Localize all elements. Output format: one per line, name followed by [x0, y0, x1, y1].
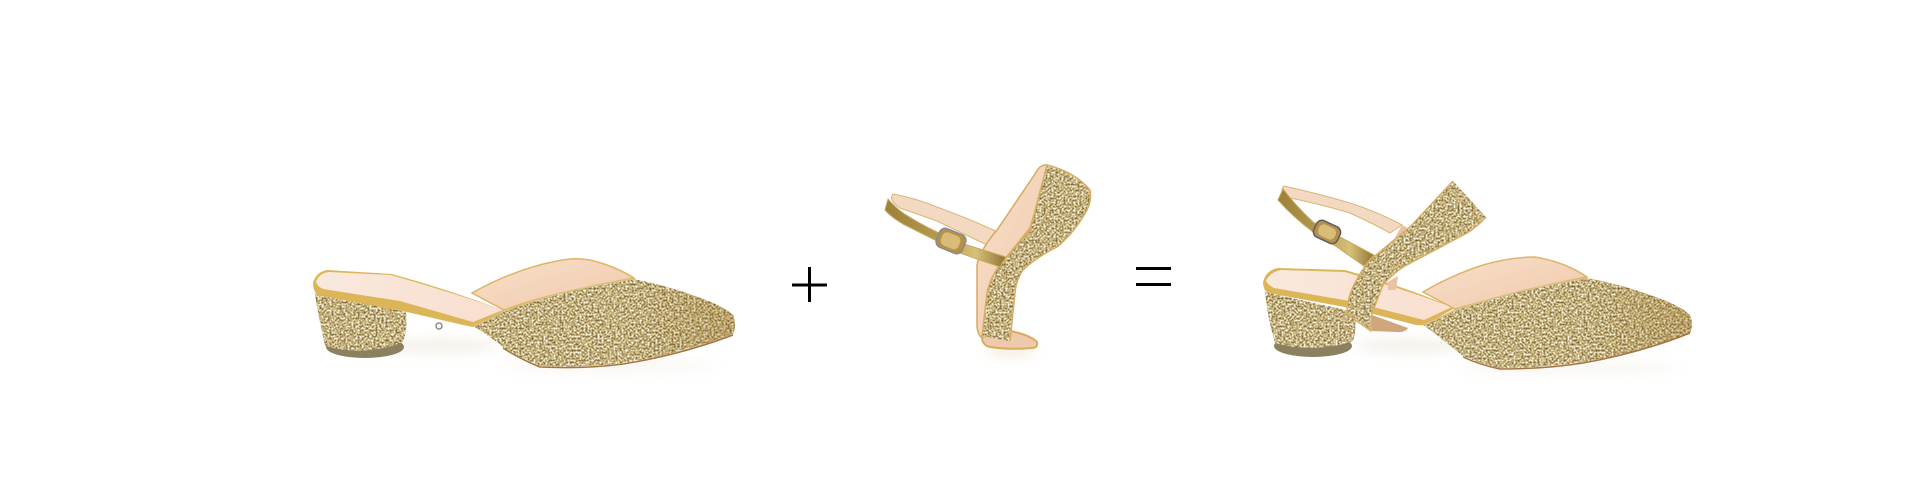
gold insole rim — [313, 270, 505, 327]
buckle — [934, 226, 968, 256]
strap hook — [436, 323, 442, 329]
foot tab — [982, 331, 1037, 349]
insole — [316, 272, 503, 322]
toe tint — [473, 279, 735, 367]
band inner lining — [977, 165, 1048, 338]
top line piping — [473, 279, 633, 326]
glitter upper — [473, 279, 735, 367]
inner lining — [1423, 257, 1587, 309]
gold strap — [885, 199, 1006, 267]
strap inner lining loop — [1282, 186, 1402, 233]
inner lining — [472, 259, 634, 310]
sole edge — [1463, 333, 1690, 369]
glitter band — [982, 165, 1091, 341]
gold insole rim — [1263, 268, 1455, 325]
heel tap — [326, 336, 404, 358]
floor shadow — [1355, 340, 1680, 371]
shoe: glitter mule — [313, 259, 735, 369]
gold strap — [1278, 189, 1374, 266]
floor shadow — [987, 349, 1035, 355]
top line piping — [1423, 278, 1587, 325]
plus sign — [792, 267, 827, 302]
heel tap — [1274, 335, 1352, 357]
sole edge — [503, 335, 733, 368]
equals sign — [1136, 268, 1171, 284]
shoe: assembled slingback — [1263, 181, 1692, 371]
detachable glitter strap — [885, 165, 1091, 355]
tan strap underside — [1372, 315, 1408, 332]
glitter block heel — [315, 294, 407, 351]
strap inner lining loop — [892, 194, 1000, 245]
band gold piping — [982, 165, 1091, 341]
buckle — [1311, 218, 1343, 246]
toe tint — [1423, 278, 1692, 368]
insole — [1266, 270, 1452, 320]
glitter block heel — [1265, 292, 1356, 348]
lining behind strap — [1384, 225, 1412, 290]
glitter upper — [1423, 278, 1692, 368]
strap gold piping — [1347, 181, 1486, 331]
glitter strap — [1347, 181, 1486, 331]
floor shadow — [380, 340, 720, 369]
